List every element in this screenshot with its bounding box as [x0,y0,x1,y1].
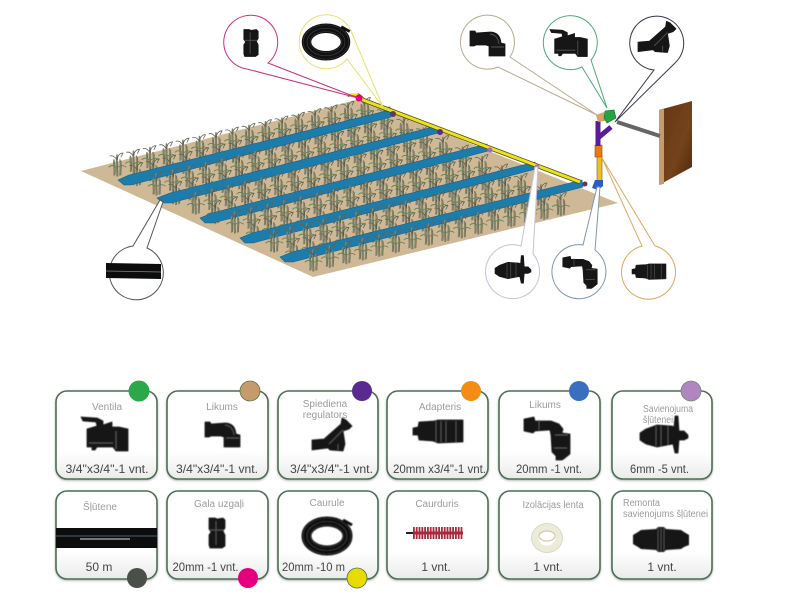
vertical yellow riser [597,155,602,181]
colour key: dark grey [127,568,147,588]
callout: valve [543,16,607,108]
callout: drip tape [106,200,163,300]
quantity: 6mm -5 vnt. [630,462,689,476]
junctions along main line [356,94,588,186]
quantity: 50 m [86,560,112,574]
card: Savienojuma šļūtenei [612,381,712,479]
pipe coil icon [303,518,352,554]
card: Šļūtene [56,491,157,588]
colour key: blue [569,381,589,401]
colour key: yellow [347,568,367,588]
elbow icon [205,422,240,447]
card title: Šļūtene [83,500,117,513]
quantity: 1 vnt. [421,560,451,574]
card title second line: regulators [303,410,347,421]
card title: Spiediena [303,399,348,410]
quantity: 20mm x3/4"-1 vnt. [393,462,486,476]
colour key: orange [461,381,481,401]
quantity: 20mm -1 vnt. [516,462,582,476]
callout: pressure regulator [615,16,684,122]
colour key: tan [240,381,260,401]
card: Caurduris [387,491,488,579]
card title: Likums [206,402,238,413]
field ground [81,99,618,277]
quantity: 3/4"x3/4"-1 vnt. [66,462,148,476]
callout: elbow [460,15,597,115]
card title: Caurule [309,498,345,509]
purple pressure regulator [598,121,611,146]
callout: drip connector [486,167,540,299]
card: Spiediena regulators [278,381,378,479]
callout: end plug [224,15,358,98]
colour key: lilac [681,381,701,401]
quantity: 1 vnt. [533,560,563,574]
hose to wall [617,122,660,136]
card: Likums [167,381,268,479]
callout: adapter [602,158,676,299]
card title: Ventila [92,402,122,413]
plant rows and drip lines [109,98,583,271]
tan elbow [596,112,605,122]
card title: Savienojuma [643,404,693,415]
card title: Caurduris [415,499,459,510]
connector icon [640,416,688,453]
repair coupling icon [633,527,689,552]
valve icon [81,417,128,451]
card: Ventila [56,380,157,479]
quantity: 3/4"x3/4"-1 vnt. [176,462,258,476]
colour key: purple [352,381,372,401]
tape roll icon [532,524,562,552]
card title: Likums [529,400,561,411]
card title second line: šļūtenei [643,415,673,426]
card: Gala uzgaļi [167,491,268,588]
regulator icon [312,418,352,451]
quantity: 20mm -10 m [282,560,345,574]
card title second line: savienojums šļūtenei [623,509,708,520]
card: Remonta savienojums šļūtenei [612,491,712,579]
card: Adapteris [387,381,488,479]
card: Izolācijas lenta [499,491,600,579]
callout: pipe coil [299,15,383,107]
adapter icon [413,420,463,443]
card title: Gala uzgaļi [194,499,244,510]
colour key: magenta [238,568,258,588]
quantity: 20mm -1 vnt. [172,560,238,574]
scene: irrigated field [81,94,692,277]
blue elbow [592,180,603,190]
green valve [604,110,616,123]
supply pipe: yellow main line [347,94,580,182]
quantity: 3/4"x3/4"-1 vnt. [290,462,373,476]
hole punch icon [406,532,463,534]
elbow icon [524,417,570,460]
card title: Remonta [623,498,660,509]
colour key: green [128,380,150,402]
end plug icon [209,518,225,548]
card title: Izolācijas lenta [522,500,584,511]
wall [659,101,692,185]
callout: lateral elbow [552,187,606,299]
card: Likums 20mm [499,381,600,479]
quantity: 1 vnt. [647,560,677,574]
orange adapter [595,145,602,157]
drip tape image [56,528,157,548]
card: Caurule [278,491,378,588]
card title: Adapteris [419,402,461,413]
